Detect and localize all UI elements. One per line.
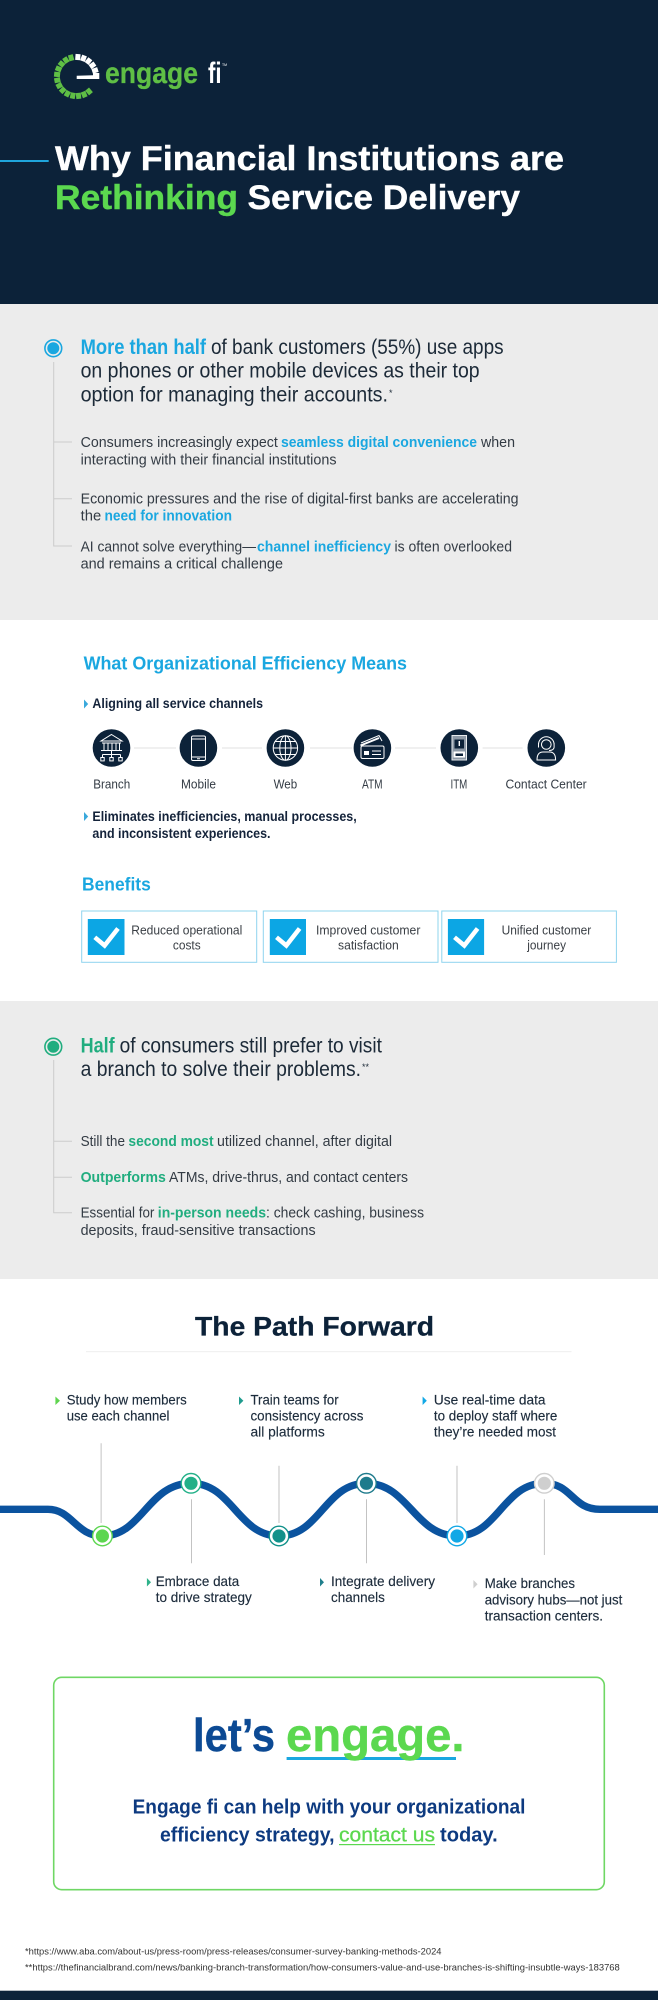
channel labels: Web [274,778,297,792]
step: real-time data [423,1391,558,1439]
icon: blue marker [45,340,62,357]
benefit card: customer satisfaction: Improved customer [316,924,420,938]
headline: of bank customers (55%) use apps [211,335,504,359]
node 2 [181,1474,201,1493]
benefit card: customer satisfaction: satisfaction [338,939,399,953]
bullet: seamless digital convenience: interacting with their financial institutions [81,453,336,469]
title [55,140,564,217]
accent line [0,160,49,162]
bullet: channel inefficiency: and remains a critical challenge [81,557,283,573]
bullet: in-person needs: : check cashing, business [266,1205,424,1221]
icon: web [267,729,304,767]
bullet: second most: utilized channel, after digital [217,1134,392,1150]
bullet: in-person needs [81,1205,424,1239]
header panel [0,0,658,304]
logo line: let's engage [193,1709,464,1761]
step: integrate channels: Integrate delivery [331,1573,435,1589]
benefit card: reduced costs: Reduced operational [131,924,242,938]
icon: mobile [180,729,217,767]
step: embrace data: to drive strategy [156,1589,252,1605]
benefit card: customer satisfaction [263,911,438,962]
headline: on phones or other mobile devices as their top [81,359,480,383]
bullet: channel inefficiency: is often overlooked [394,539,512,555]
step: study members [55,1391,187,1423]
headline: option for managing their accounts. [81,382,388,406]
bullet: need for innovation: Economic pressures and the rise of digital-first banks are accelerating [81,492,519,508]
timeline connector [54,1060,72,1213]
step: study members: Study how members [67,1391,187,1407]
icon: contact center [528,729,565,767]
step: advisory hubs: Make branches [485,1575,575,1591]
node 4 [357,1474,376,1493]
panel: organizational efficiency [0,620,658,1001]
headline: a branch to solve their problems. [81,1057,361,1081]
step: integrate channels: channels [331,1589,385,1605]
bullet: outperforms: ATMs, drive-thrus, and contact centers [169,1170,408,1186]
sub-point: eliminates inefficiencies: Eliminates inefficiencies, manual processes, [92,809,357,824]
sub-point: eliminates inefficiencies [84,809,357,841]
sub-point: aligning channels: Aligning all service channels [92,696,263,711]
heading: The Path Forward [195,1312,434,1342]
bullet: second most [81,1134,392,1150]
bullet: second most: second most [128,1134,214,1150]
benefit card: unified journey: journey [526,939,567,953]
logo: engage fi [54,54,227,99]
step: real-time data: Use real-time data [434,1391,546,1407]
timeline connector [54,362,72,546]
call to action panel [54,1677,604,1890]
headline: * [389,388,393,398]
step: integrate channels [320,1573,435,1605]
bullet: need for innovation: the [81,509,101,525]
panel: digital preference [0,304,658,620]
title: Service Delivery [248,179,520,217]
channel connectors [134,747,523,749]
headline [81,1033,382,1081]
channel labels [93,778,587,792]
step: advisory hubs [473,1575,622,1623]
benefit card: reduced costs: costs [173,939,201,953]
bullet: outperforms: Outperforms [81,1170,166,1186]
headline: of consumers still prefer to visit [120,1033,382,1057]
icon: branch [93,729,130,767]
bullet: in-person needs: Essential for [81,1205,155,1221]
heading: benefits: Benefits [82,874,151,895]
bullet: need for innovation [81,492,519,525]
bullet: seamless digital convenience: when [480,435,515,451]
step: advisory hubs: advisory hubs—not just [485,1591,622,1607]
channel labels: ITM [450,778,467,792]
call to action text: efficiency strategy, [160,1824,334,1847]
step: train teams: all platforms [250,1423,325,1439]
panel: branch preference [0,1001,658,1279]
bullet: in-person needs: deposits, fraud-sensitive transactions [81,1223,316,1239]
panel: the path forward [0,1312,658,1623]
benefit card: reduced costs [82,911,257,962]
leader lines [101,1443,544,1563]
step: train teams [239,1391,363,1439]
step: embrace data: Embrace data [156,1573,239,1589]
step: real-time data: they’re needed most [434,1423,556,1439]
call to action text: Engage fi can help with your organizational [133,1795,525,1818]
sub-point: eliminates inefficiencies: and inconsistent experiences. [92,826,271,841]
logo: engage fi: fi [208,57,222,90]
bullet: seamless digital convenience: seamless digital convenience [281,435,477,451]
bullet: need for innovation: need for innovation [104,509,232,525]
headline: Half [81,1033,115,1057]
bullet: channel inefficiency: channel inefficiency [257,539,392,555]
icon: green marker [45,1038,62,1055]
footer bar [0,1991,658,2000]
benefit card: unified journey: Unified customer [502,924,591,938]
node 6 [534,1474,554,1493]
channel labels: ATM [362,778,383,792]
step: train teams: Train teams for [250,1391,339,1407]
title: Why Financial Institutions are [55,140,564,178]
step: embrace data [147,1573,252,1605]
footnotes [25,1947,620,1973]
logo line: let's engage: engage. [286,1709,464,1761]
step: train teams: consistency across [250,1407,363,1423]
headline: More than half [81,335,207,359]
node 5 [447,1526,467,1546]
step: advisory hubs: transaction centers. [485,1607,603,1623]
headline: ** [362,1062,370,1072]
footnotes: *https://www.aba.com/about-us/press-room/press-releases/consumer-survey-banking-methods-2024 [25,1947,442,1957]
icon: ATM card [354,729,391,767]
bullet: second most: Still the [81,1134,125,1150]
bullet: seamless digital convenience [81,435,515,469]
heading: What Organizational Efficiency Means [84,652,407,673]
bullet: channel inefficiency: AI cannot solve everything— [81,539,256,555]
bullet: in-person needs: in-person needs [158,1205,266,1221]
node 1 [93,1526,112,1546]
step: study members: use each channel [67,1407,170,1423]
channel labels: Branch [93,778,130,792]
logo line: let's engage: let’s [193,1709,275,1761]
step: real-time data: to deploy staff where [434,1407,558,1423]
call to action text: today. [440,1824,498,1847]
bullet: seamless digital convenience: Consumers increasingly expect [81,435,278,451]
benefit card: unified journey [442,911,616,962]
call to action text: contact us [339,1824,435,1847]
node 3 [269,1526,289,1546]
title: Rethinking [55,179,238,217]
logo: engage fi: TM [222,63,227,67]
channel labels: Mobile [181,778,216,792]
bullet: channel inefficiency [81,539,512,573]
channel labels: Contact Center [506,778,587,792]
call to action text [133,1795,525,1847]
headline [81,335,504,406]
logo: engage fi: engage [105,57,198,90]
wave path [0,1483,658,1536]
footnotes: **https://thefinancialbrand.com/news/banking-branch-transformation/how-consumers-value-and-use-branches-is-shifting-insubtle-ways-183768 [25,1963,620,1973]
icon: ITM [440,729,478,767]
